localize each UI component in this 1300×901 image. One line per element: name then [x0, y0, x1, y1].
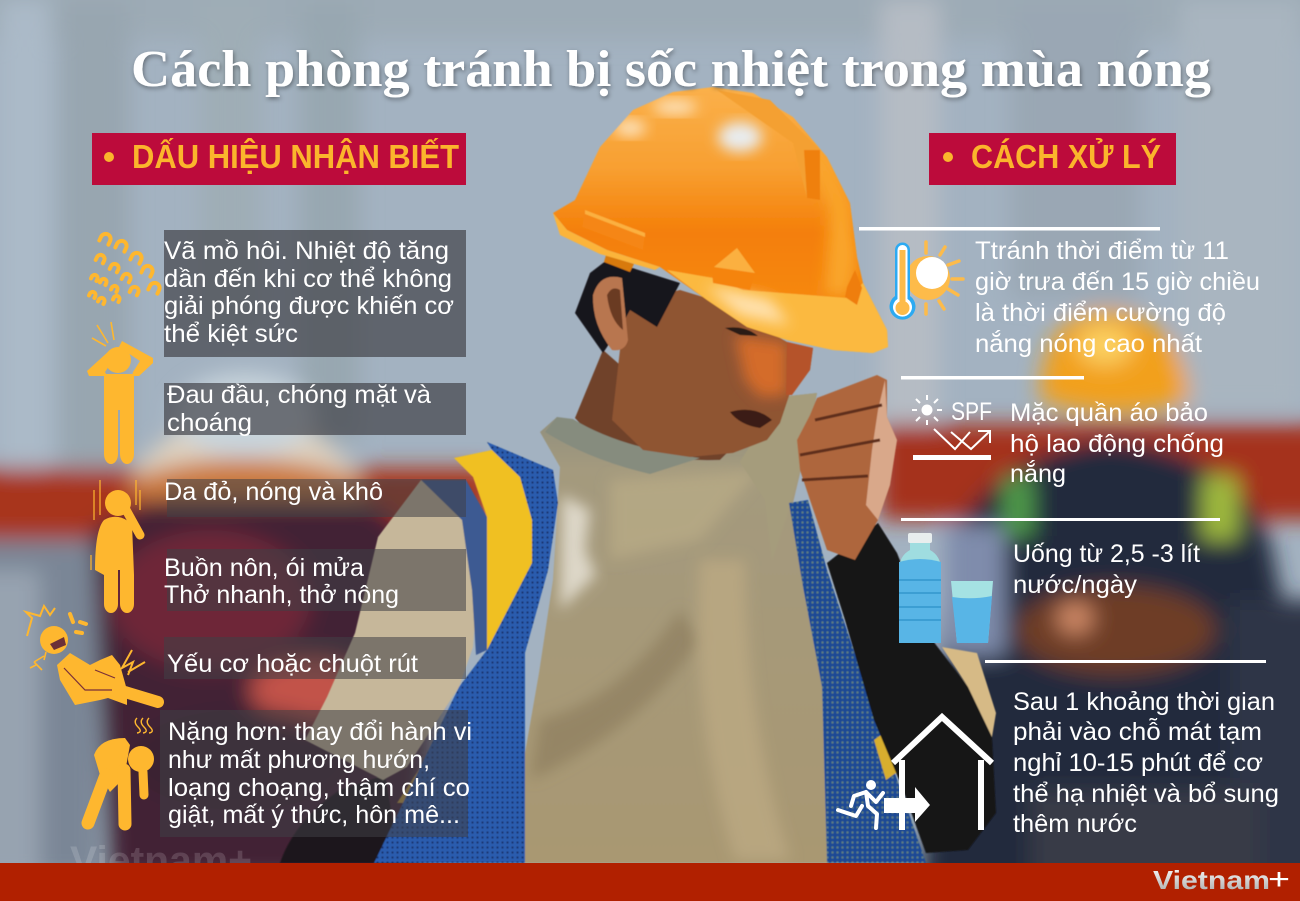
shirt folds	[530, 470, 790, 860]
text block: rest: Sau 1 khoảng thời gian	[1013, 688, 1275, 716]
text block: rest: thể hạ nhiệt và bổ sung	[1013, 780, 1279, 808]
text block: avoid hours: nắng nóng cao nhất	[975, 329, 1202, 358]
text block: nausea: Buồn nôn, ói mửa	[164, 554, 364, 582]
icon: person with headache	[87, 322, 153, 464]
yellow strap	[454, 450, 532, 650]
icon: sweat drops	[89, 232, 161, 304]
text block: water: Uống từ 2,5 -3 lít	[1013, 540, 1200, 568]
title: Cách phòng tránh bị sốc nhiệt trong mùa nóng	[131, 41, 1211, 98]
text block: sweating: thể kiệt sức	[164, 320, 298, 348]
text block: red skin	[164, 478, 466, 517]
text block: rest: thêm nước	[1013, 810, 1137, 838]
icon: water bottle and glass	[899, 533, 993, 643]
text block: severe: như mất phương hướn,	[168, 746, 430, 774]
face	[612, 290, 813, 457]
text block: severe: Nặng hơn: thay đổi hành vi	[168, 718, 472, 746]
text block: sweating: giải phóng được khiến cơ	[164, 292, 454, 320]
glove	[942, 647, 996, 737]
text block: clothing	[1010, 399, 1224, 488]
heading: dấu hiệu nhận biết: DẤU HIỆU NHẬN BIẾT	[132, 138, 459, 175]
text block: headache: Đau đầu, chóng mặt và	[167, 381, 431, 409]
hair	[575, 260, 680, 353]
watermark: Vietnam+	[70, 839, 252, 883]
logo: Vietnam+: Vietnam	[1153, 865, 1270, 895]
text block: red skin: Da đỏ, nóng và khô	[164, 478, 383, 506]
hand	[797, 375, 897, 560]
icon: person with cramp	[26, 606, 158, 705]
text block: water: nước/ngày	[1013, 571, 1138, 599]
text block: sweating: Vã mồ hôi. Nhiệt độ tăng	[164, 237, 449, 265]
heading: cách xử lý	[929, 133, 1176, 185]
panel: cách xử lý	[838, 227, 1279, 838]
footer bar	[0, 863, 1300, 901]
text block: cramps	[164, 637, 466, 679]
logo: Vietnam+	[1153, 863, 1290, 896]
icon: SPF protection	[912, 395, 992, 460]
icon: SPF protection: SPF	[951, 398, 992, 426]
icon: person collapsing	[88, 718, 154, 824]
pulled fabric	[740, 393, 817, 560]
ear	[593, 277, 628, 350]
heading: cách xử lý: CÁCH XỬ LÝ	[971, 138, 1161, 175]
text block: clothing: Mặc quần áo bảo	[1010, 399, 1208, 427]
text block: severe: loạng choạng, thậm chí co	[168, 774, 470, 802]
helmet ridge	[717, 90, 820, 200]
left sleeve	[305, 480, 478, 780]
icon: person nauseous	[91, 480, 140, 613]
black sleeve	[827, 523, 996, 853]
text block: severe: giật, mất ý thức, hôn mê...	[168, 801, 460, 829]
helmet	[553, 87, 888, 353]
text block: avoid hours: là thời điểm cường độ	[975, 299, 1226, 327]
blue vest right	[789, 500, 926, 863]
text block: avoid hours	[975, 237, 1260, 358]
text block: headache: choáng	[167, 409, 252, 437]
text block: sweating	[164, 230, 466, 357]
shirt	[525, 393, 827, 863]
text block: avoid hours: Ttránh thời điểm từ 11	[975, 237, 1229, 265]
text block: avoid hours: giờ trưa đến 15 giờ chiều	[975, 268, 1260, 296]
text block: nausea	[164, 549, 466, 611]
heading: dấu hiệu nhận biết	[92, 133, 466, 185]
helmet brim	[667, 270, 888, 353]
dark left glove	[280, 775, 400, 863]
red band	[0, 468, 490, 542]
icon: run into house	[838, 717, 992, 830]
text block: cramps: Yếu cơ hoặc chuột rút	[167, 650, 418, 678]
text block: sweating: dần đến khi cơ thể không	[164, 265, 452, 293]
main photo: worker wiping face	[280, 87, 996, 863]
text block: nausea: Thở nhanh, thở nông	[164, 581, 399, 609]
text block: severe	[160, 710, 472, 837]
text block: rest: nghỉ 10-15 phút để cơ	[1013, 749, 1263, 777]
left figure	[92, 490, 440, 880]
right worker	[920, 440, 1300, 890]
text block: rest	[1013, 688, 1279, 838]
helmet shading and highlights	[614, 100, 857, 295]
neck	[575, 350, 740, 460]
text block: clothing: nắng	[1010, 459, 1066, 488]
icon: thermometer and sun	[890, 242, 963, 320]
logo: Vietnam+: +	[1268, 863, 1290, 896]
panel: dấu hiệu text blocks	[160, 230, 472, 837]
text block: clothing: hộ lao động chống	[1010, 430, 1224, 458]
helmet clips	[582, 210, 645, 250]
text block: water	[1013, 540, 1200, 599]
text block: headache	[164, 381, 466, 437]
collar	[545, 417, 700, 474]
text block: rest: phải vào chỗ mát tạm	[1013, 717, 1262, 746]
blue vest left	[374, 442, 558, 863]
